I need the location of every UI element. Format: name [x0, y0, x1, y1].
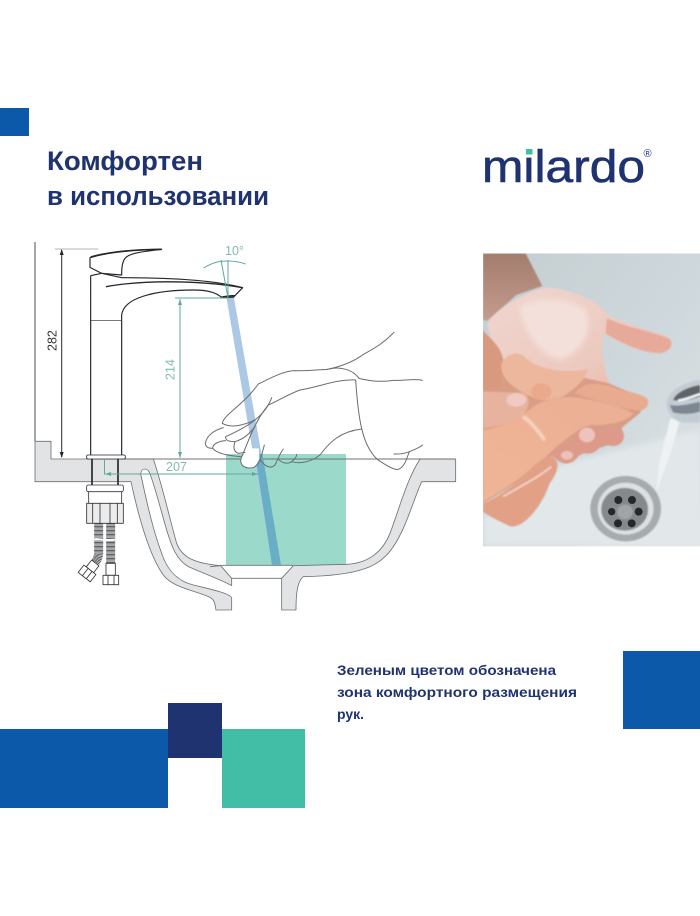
thumb of adult palm saturated	[606, 318, 671, 353]
child palm and thumb	[501, 354, 588, 400]
dimension 10 degrees	[204, 244, 246, 298]
adult soapy palm	[488, 287, 672, 384]
lock nut	[87, 485, 123, 492]
water from faucet	[658, 418, 680, 486]
handle	[90, 249, 162, 275]
decorative blue square right	[623, 651, 700, 729]
navy block	[168, 703, 222, 758]
basin and countertop section	[35, 441, 456, 610]
drain	[590, 476, 661, 541]
dimension 207	[104, 459, 258, 476]
teal block	[222, 729, 305, 808]
child arm and finger lower	[483, 397, 633, 502]
wall line	[34, 242, 36, 441]
title	[47, 146, 269, 211]
decorative blue square top left	[0, 108, 29, 136]
dimension 282: 282	[46, 330, 60, 351]
logo: milardo: milardo	[482, 141, 645, 192]
adult fingertips behind	[555, 423, 624, 463]
mounting flange	[87, 455, 125, 459]
water stream	[226, 298, 281, 565]
decorative bottom blocks	[0, 703, 305, 808]
hose break marks	[93, 536, 117, 543]
soap highlights on palm	[520, 300, 588, 360]
skin underlay between fingers	[483, 330, 646, 503]
faucet chrome	[667, 379, 700, 423]
left connector	[78, 558, 101, 582]
spout and column	[91, 273, 243, 455]
dimension 207: 207	[166, 460, 187, 474]
dimension 214	[164, 298, 228, 458]
right connector	[106, 563, 115, 575]
comfort zone green rectangle	[226, 454, 346, 565]
hands line drawing	[205, 332, 423, 469]
caption text	[337, 662, 577, 722]
caption text: рук.	[337, 706, 364, 722]
dimension 282	[46, 249, 64, 458]
lower adult hand	[483, 457, 557, 527]
threaded nut	[87, 503, 123, 523]
caption text: зона комфортного размещения	[337, 684, 577, 700]
technical drawing: faucet and basin	[35, 242, 456, 610]
dimension 10 degrees: 10°	[225, 244, 244, 258]
adult second hand	[483, 332, 503, 390]
lower finger white fill	[241, 448, 259, 468]
adult forearm top	[483, 253, 542, 321]
lower hand back	[241, 380, 356, 468]
stem	[92, 459, 118, 485]
basin background	[483, 253, 700, 546]
photo: washing hands under faucet	[483, 253, 700, 546]
water stream over comfort zone	[255, 454, 281, 565]
dimension 214: 214	[164, 359, 178, 380]
dimension top reference line	[55, 248, 98, 250]
faucet body	[55, 249, 243, 485]
title: Комфортен	[47, 146, 203, 176]
infographic canvas	[0, 108, 700, 808]
upper hand	[222, 368, 359, 423]
blue block	[0, 729, 168, 808]
white sink area	[483, 430, 700, 546]
countertop surface line	[123, 458, 455, 460]
logo: milardo: ®	[644, 148, 652, 160]
sleeve	[359, 378, 422, 381]
child finger upper	[575, 384, 648, 410]
title: в использовании	[47, 181, 269, 211]
forearm top	[327, 332, 394, 369]
braided hoses	[89, 523, 111, 569]
caption text: Зеленым цветом обозначена	[337, 662, 556, 678]
connection fittings and hoses	[78, 485, 123, 585]
